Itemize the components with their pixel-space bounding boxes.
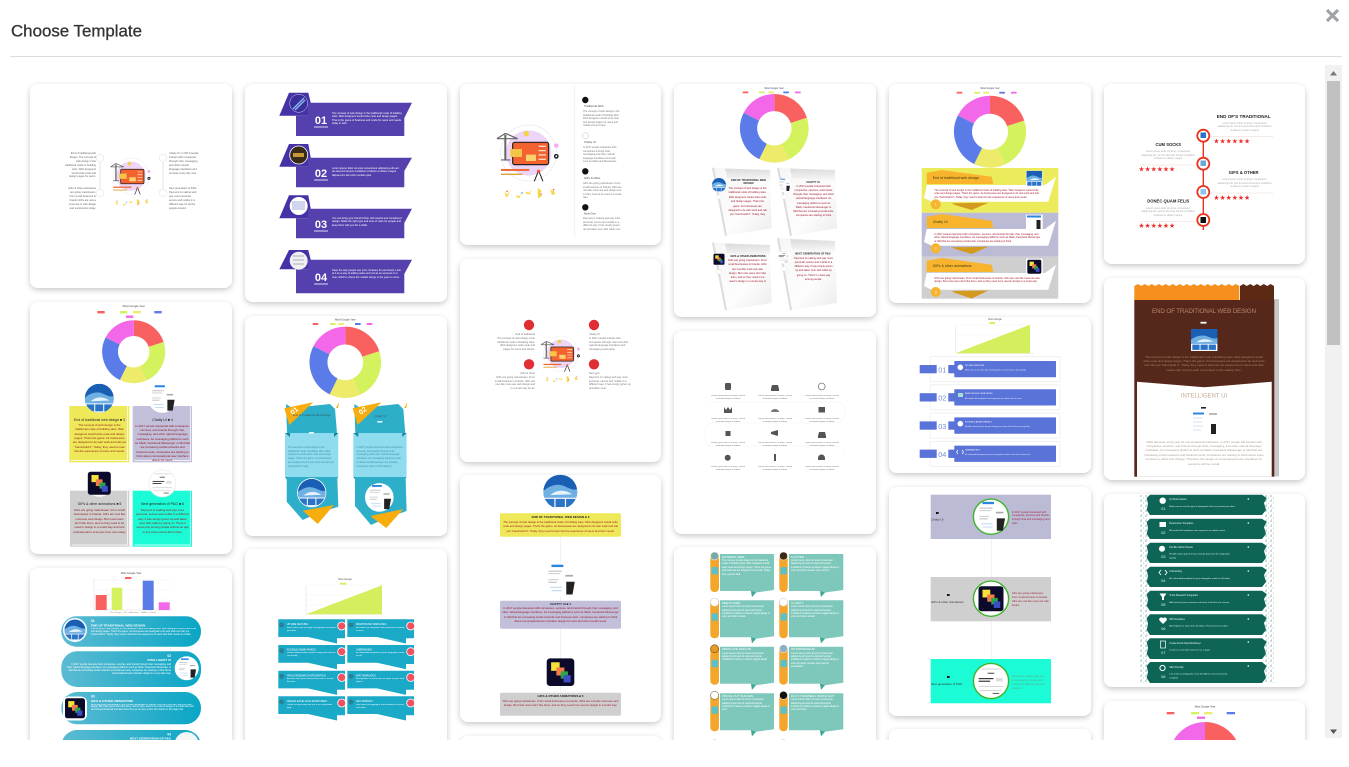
yellow box: The concept of web design is the traditional mode of building sites. Web designers would write code and design pages. That's the game. As businesses are designed to do web work and call you "hand-build it". Today, they need to look into the experience of users and needs. — [73, 423, 126, 453]
banner 02: Lorem ipsum dolor sit amet consectetur adipiscing elit sed do eiusmod tempor incididunt ut labore et dolore magna aliqua enim ad minim veniam quis. — [332, 167, 399, 177]
caption texts row 1 — [708, 394, 842, 402]
panel: template 14 area chart with numbered blue rows — [889, 317, 1091, 473]
text block: top right — [589, 333, 629, 355]
timeline item 1 — [1197, 114, 1273, 145]
brush row 6 — [1147, 614, 1267, 635]
row 01: Make sure to use this type of infographic to present your data quickly — [965, 369, 1026, 372]
ribbon 08: Lets make an infographic more friendly for search and ranks — [356, 704, 404, 709]
image: web design circle — [543, 475, 577, 509]
text block: top right: Chatty UI. In 2017 people interact with companies through chat, messaging and other natural language interfaces and services every day now. — [169, 152, 198, 175]
brush row 2: All content fits templates and responsive to mobile screen — [1169, 529, 1226, 532]
timeline item 4 — [1139, 198, 1209, 230]
yellow box — [69, 406, 129, 462]
row 1 items: Lorem ipsum dolor sit amet consectetur adipiscing elit sed do eiusmod tempor incididunt ut labore et dolore magna aliqua ut enim ad minim veniam quis nostrud — [791, 559, 839, 572]
brush row 3: Flexible admin panels let you change data from the infographic — [1169, 552, 1231, 556]
panel: template 8 bar chart with pills — [30, 568, 232, 767]
chart legend — [1167, 712, 1235, 719]
caption texts row 1: Lorem ipsum dolor sit amet, sed do eiusmod tempor ut labore — [711, 394, 745, 400]
brush row 1 — [1147, 495, 1267, 515]
panel: template 10 donut chart with paper sheets — [674, 84, 876, 317]
stripe: end of traditional web design: The concept of web design is the traditional mode of building sites. Web designers would write code and design pages. That's the game. As businesses are designed to do web work and call you "hand-build it". Today, they need to look into the experience of users and needs. — [934, 188, 1039, 199]
chart title: Most Google Year — [123, 304, 145, 308]
row 02: All content fits templates and responsive to mobile with no issue — [965, 397, 1022, 400]
timeline item 4: DONEC QUAM FELIS — [1147, 198, 1190, 204]
pill 01: END OF TRADITIONAL WEB DESIGN — [91, 623, 146, 627]
timeline item 2: ★★★★★★ — [1139, 166, 1176, 173]
paper sheet 4: NEXT GENERATION OF P&G — [795, 252, 831, 256]
paper sheet 4 — [777, 238, 837, 310]
caption texts row 3: Lorem ipsum dolor sit amet, sed do eiusmod tempor ut labore — [711, 442, 745, 447]
bar chart — [94, 579, 172, 614]
icon row 4 — [725, 454, 825, 461]
area chart — [956, 325, 1034, 353]
teal box: Next generation of P&G ■ 6 — [141, 502, 184, 506]
paper sheet 4: Payment is making web pay more personal, secure and mobile in a different way. It has simply grown up and taken over with cable by going on. There it moves pay among people. — [794, 256, 833, 281]
timeline item 3: ★★★★★★ — [1214, 194, 1251, 201]
ribbon block 01: End of Traditional Web Design — [293, 413, 331, 417]
text block: bottom left — [493, 372, 535, 395]
pill 03: 03 — [91, 694, 95, 698]
panel: template 1 illustration with four text blocks — [30, 84, 232, 288]
caption texts row 1: Lorem ipsum dolor sit amet, sed do eiusmod tempor ut labore — [758, 394, 792, 400]
text block: bottom right: Next gen — [589, 372, 599, 375]
grey box: GIFs are going mainstream. From small businesses to brands, GIFs are now like must-use web design. But most users don't like them, and so they need to be used in design in a smart way. — [502, 700, 618, 707]
row 04: An unbranded template for your infographic made to sell and to share fast — [965, 453, 1031, 456]
text block: bottom right: Payment is making web pay more personal, secure and mobile in a different way. It has simply grown up and taken over. — [589, 376, 631, 390]
timeline spine — [1202, 136, 1204, 230]
grey box — [70, 491, 129, 547]
row 02: 02 — [938, 394, 946, 403]
brush row 3: Flexible Admin Panels — [1169, 546, 1194, 549]
icon row 2 — [724, 407, 825, 413]
panel: template 17 brown poster — [1104, 278, 1305, 480]
caption texts row 4: Lorem ipsum dolor sit amet, sed do eiusmod tempor ut labore — [711, 466, 745, 471]
panel: template 5 vertical timeline of coloured boxes — [460, 475, 661, 722]
ribbon block 01: The concept of web design is the traditional mode of building sites. Web designers would write code and design pages. That's the game. As businesses are designed to do web work and call you hand-build it today. — [288, 446, 334, 468]
banner 04: 04 — [315, 272, 328, 284]
poster brown section: The concept of web design is the traditional mode of building sites. Web designers would write code and design pages. That's the game. As businesses are designed to do web work and call you "hand-build it". Today, they need to look into the experience of users and their needs right now for each new project in the making here. — [1143, 354, 1265, 372]
panel: template 19 donut chart partly visible — [1104, 701, 1305, 767]
brush row 7: Create an excel data and use it as a page — [1169, 648, 1211, 652]
icon row 3 — [726, 430, 826, 438]
text block: top left: End of traditional — [516, 333, 535, 336]
row 1 items: The concept of web design is the traditional mode of building sites. Web designers would write code and design pages. That's the game and business are designed to do work. Today they need to look — [722, 559, 771, 576]
brush row 4: 04 — [1161, 578, 1166, 583]
panel: template 13 donut with banner stripes — [889, 84, 1091, 303]
pill 03: GIFS & OTHER ANIMATIONS — [91, 699, 133, 703]
caption texts row 2: Lorem ipsum dolor sit amet, sed do eiusmod tempor ut labore — [711, 418, 745, 423]
poster brown section: END OF TRADITIONAL WEB DESIGN — [1152, 308, 1256, 315]
brush row 5 — [1147, 591, 1267, 611]
panel: template 11 icon grid — [674, 331, 876, 534]
brush row 4: Unbranding — [1169, 570, 1182, 573]
row 3 items: Lorem ipsum dolor sit amet consectetur adipiscing elit sed do eiusmod tempor incididunt ut labore et dolore magna aliqua — [722, 652, 767, 661]
pill 03 — [61, 692, 201, 724]
caption texts row 4: Lorem ipsum dolor sit amet, sed do eiusmod tempor ut labore — [805, 466, 839, 471]
brush row 6: All templates to share from 30 styles. Pick your best to add it — [1169, 624, 1228, 628]
row 3 items — [710, 645, 843, 690]
brush row 7: Create Excel Data Worksheet — [1169, 642, 1201, 645]
pill 02: INTELLIGENT UI — [148, 658, 171, 662]
brush row 3 — [1147, 543, 1267, 563]
teal box: Payment is making web pay more personal, secure and mobile in a different way. It has simply grown up and taken over with cable by going on. There it moves pay among people without an app or any extra cost at all for them. — [136, 508, 189, 534]
image: chatty UI circle — [543, 563, 577, 597]
text block: top right: Chatty UI — [589, 333, 600, 336]
purple box — [500, 601, 621, 629]
pill 04: NEXT GENERATION OF P&G — [130, 736, 172, 740]
chart title: Most Google Year — [121, 571, 141, 575]
row: GIFs and other animations: GIF's & other animations — [931, 600, 964, 604]
panel: template 2 purple numbered banners — [245, 84, 447, 302]
donut chart — [1169, 722, 1241, 767]
stripe: end of traditional web design: End of traditional web design — [933, 176, 979, 180]
ribbon block 01: 01 — [290, 406, 300, 417]
panel: template 16 red timeline — [1104, 84, 1305, 264]
scrollbar — [1325, 65, 1342, 738]
ribbon 06: WIFI TEMPLATES — [356, 674, 376, 677]
ribbon block 02: In 2017 people interacted with companies, services, and brands through chat, messaging, and other natural language interfaces. As messaging platforms such as Slack and Messenger are growing, companies start to think about it. — [356, 446, 403, 468]
list item 3 — [582, 168, 622, 198]
timeline item 1: Lorem ipsum dolor sit amet, consectetur adipiscing elit, sed do eiusmod tempor incididunt ut labore et dolore magna — [1218, 122, 1271, 132]
stripe: GIFs and other animations: 3 — [935, 290, 937, 294]
stripe: end of traditional web design — [922, 168, 1058, 213]
chart legend — [743, 92, 801, 93]
timeline item 3: Lorem ipsum dolor sit amet, consectetur adipiscing elit, sed do eiusmod tempor incididunt ut labore et dolore magna — [1218, 178, 1271, 188]
ribbon 02: All content fits templates and responsive to mobile screens — [356, 626, 405, 632]
list item 1: Traditional Web — [584, 104, 604, 108]
row 02: RESPONSIVE TEMPLATES — [965, 392, 993, 395]
list item 3: GIFs & Other — [584, 176, 601, 180]
row 01: 01 — [938, 366, 946, 374]
ribbon 08 — [347, 696, 415, 720]
yellow box: The concept of web design is the traditional mode of building sites. Web designers would write code and design pages. That's the game. As businesses are designed to do web work and call you "hand-build it". Today, they need to look into the experience of users and their needs. — [503, 521, 618, 533]
panel: template 7 donut chart with ribbon columns — [245, 316, 447, 536]
stripe: chatty UI: 2 — [935, 247, 937, 251]
row 2 items: Lorem ipsum dolor sit amet consectetur adipiscing elit sed do eiusmod tempor incididunt ut labore et dolore magna aliqua ut enim ad minim veniam — [791, 605, 839, 618]
row: chatty UI — [931, 495, 1051, 539]
timeline item 1: END OF'S TRADITIONAL — [1217, 114, 1271, 119]
text block: bottom left: GIFs & other animations are going mainstream. From small business to brands GIFs are now a must use in web design and social posts today. — [68, 187, 96, 210]
panel: template 12 teal boxes with orange pills — [674, 547, 876, 767]
panel: template 18 green brush strokes — [1104, 494, 1305, 687]
timeline item 3: GIFS & OTHER — [1229, 170, 1259, 175]
row 03: Flexible admin panels let you change your data and sort them out quickly — [965, 425, 1030, 428]
ribbon 07: Create an excel data and use it as a worksheet page — [287, 704, 332, 709]
stripe: GIFs and other animations — [922, 257, 1058, 299]
brush row 5: Track Research Integration — [1169, 594, 1199, 597]
chart legend — [313, 323, 372, 325]
chart legend — [957, 92, 1017, 94]
brush row 6: Wifi Templates — [1169, 618, 1186, 621]
poster white section: INTELLIGENT UI — [1181, 394, 1227, 400]
brush row 1: 01 — [1161, 506, 1166, 511]
row: chatty UI: Chatty UI — [931, 518, 944, 522]
poster top zigzag band — [1134, 284, 1274, 300]
brush row 3: quickly — [1169, 558, 1177, 560]
banner 01 — [279, 93, 412, 136]
brush end speckles — [1139, 495, 1274, 683]
brush row 8: Lets make an infographic more friendly for search and ranks — [1169, 672, 1228, 676]
row 01: UP SIDE FEATURE — [965, 364, 985, 367]
pill 02: In 2017 people interacted with companies, services, and brands through chat, messaging, and other natural language interfaces. As messaging platforms such as Slack, Facebook Messenger or WeChat are increasing social networks and business tools, companies are starting to think about conversational user interface design in a very wide way. — [67, 662, 171, 674]
row 01 — [920, 357, 1060, 382]
poster brown section — [1134, 300, 1274, 477]
banner 02 — [279, 144, 412, 187]
row 03 — [920, 413, 1060, 438]
caption texts row 2: Lorem ipsum dolor sit amet, sed do eiusmod tempor ut labore — [805, 418, 839, 423]
panel: template cut off by scroll area — [889, 729, 1091, 767]
list item 2 — [582, 133, 621, 162]
list item 2: Chatty UI — [584, 140, 596, 144]
ribbon 06 — [347, 671, 415, 695]
purple box — [133, 406, 192, 462]
brush row 2: 02 — [1161, 530, 1166, 535]
text block: top right: In 2017 people interact with companies through chat and other natural language interfaces and messaging tools today. — [589, 337, 628, 351]
row 04 — [920, 441, 1060, 466]
chart title: Most Google Year — [980, 87, 1000, 90]
timeline item 2: Lorem ipsum dolor sit amet, consectetur adipiscing elit, sed do eiusmod tempor incididunt ut labore et dolore magna — [1141, 150, 1195, 160]
ribbon 02: RESPONSIVE TEMPLATES — [356, 623, 387, 626]
banner 03: You can bring your brand further with careful and considered design. Make the right type and tone of voice for people and keep them with you for a while. — [332, 217, 401, 227]
banner 02: 02 — [315, 168, 327, 180]
chart legend — [989, 322, 995, 324]
row 3 items: Lorem ipsum dolor sit amet consectetur adipiscing elit sed do eiusmod tempor incididunt ut labore et dolore magna aliqua ut enim ad minim veniam quis nostrud exercitation — [791, 652, 839, 668]
paper sheet 2 — [777, 168, 837, 236]
ribbon 03 — [278, 645, 346, 669]
grey box: GIFS & OTHER ANIMATIONS ■ 5 — [538, 694, 583, 698]
row 02 — [920, 385, 1060, 410]
illustration: crane and screen — [497, 125, 559, 199]
row 4 items — [710, 691, 843, 736]
paper sheet 1: END OF TRADITIONAL WEB DESIGN — [731, 179, 766, 185]
row 5 pill tops — [710, 740, 788, 748]
caption texts row 1: Lorem ipsum dolor sit amet, sed do eiusmod tempor ut labore — [805, 394, 839, 400]
text block: bottom right: Next generation of P&G. Payment is making web pay more personal, secure and mobile in a different way for all the people around. — [169, 187, 197, 210]
ribbon block 02 — [353, 402, 407, 528]
chart title: Most Google Year — [1195, 704, 1215, 708]
pill 02 — [61, 651, 201, 687]
brush row 8: SEO Friendly — [1169, 666, 1184, 669]
ribbon 07 — [278, 696, 346, 720]
banner 03: 03 — [315, 219, 327, 231]
brush row 8: complete — [1169, 676, 1179, 680]
text block: bottom left: GIFs are going mainstream. From small business to brands, GIFs are now like must-use web design and in a smart way for all. — [495, 376, 535, 390]
row 4 items: Lorem ipsum dolor sit amet consectetur adipiscing elit sed do eiusmod tempor incididunt ut labore et dolore magna aliqua ut enim ad minim — [791, 698, 839, 711]
paper sheet 3 — [712, 242, 772, 310]
chart title: Most Google Year — [764, 87, 784, 90]
red item icons — [524, 320, 599, 369]
brush row 8 — [1147, 662, 1267, 683]
brush row 3: 03 — [1161, 554, 1166, 559]
stripe: GIFs and other animations: GIFs & other animations — [933, 264, 972, 268]
ribbon 05: Add and track your research and share it all with the team — [287, 678, 334, 683]
dialog title: Choose Template — [11, 22, 142, 40]
ribbon 04: UNBRANDING — [356, 649, 372, 652]
donut chart — [102, 320, 165, 383]
ribbon 04 — [347, 645, 415, 669]
icon: close button — [1327, 10, 1338, 21]
banner 01: The concept of web design is the traditional mode of building sites. Web designers would write code and design pages. That is the game of business and mode for users and needs today in web. — [332, 112, 402, 125]
timeline item 1: ★★★★★★ — [1214, 138, 1251, 145]
caption texts row 3 — [708, 442, 842, 450]
yellow box: End of traditional web design ■ 3 — [74, 418, 125, 422]
illustration: crane and screen — [541, 336, 580, 383]
ribbon 04: An unbranded template for your infographic made to sell — [356, 652, 404, 657]
ribbon 03: Flexible admin panels let you change data and the sort quickly — [287, 652, 335, 657]
stripe: GIFs and other animations: GIFs are going mainstream. From small businesses to brands, GIFs are now like must-use web design. But most users don't like them, and so they need to be used in design in a smart way. — [934, 276, 1040, 283]
ribbon block 02: 02 — [358, 406, 368, 417]
purple box: Chatty UI ■ 4 — [152, 418, 173, 422]
icon row 1 — [725, 383, 825, 391]
donut chart — [954, 95, 1026, 168]
pill 01: 01 — [91, 619, 95, 623]
illustration: crane and screen — [110, 158, 150, 206]
stripe: end of traditional web design: 1 — [935, 203, 937, 207]
banner 03 — [279, 195, 412, 238]
image: next generation circle — [148, 469, 176, 497]
brush row 2: Responsive Templates — [1169, 522, 1194, 525]
donut chart — [740, 94, 809, 163]
ribbon 07: CREATE EXCEL DATA WORKSHEET — [287, 700, 328, 703]
caption texts row 2: Lorem ipsum dolor sit amet, sed do eiusmod tempor ut labore — [758, 418, 792, 423]
banner 01: 01 — [315, 115, 327, 127]
stripe: chatty UI: Chatty UI — [933, 220, 948, 224]
stripe: chatty UI — [922, 213, 1058, 257]
text block: bottom right — [589, 372, 631, 395]
ribbon block 01 — [284, 402, 339, 524]
donut chart — [309, 326, 381, 398]
grey box — [500, 693, 621, 716]
brush row 1: Make sure to use this type of infographic that can present your data — [1169, 505, 1235, 508]
ribbon 01 — [278, 619, 346, 644]
ribbon 02 — [347, 619, 415, 644]
image: web design circle — [85, 384, 114, 413]
chart legend — [340, 583, 346, 585]
ribbon block 02: Chatty UI — [374, 414, 386, 418]
pill 02: 02 — [167, 654, 171, 658]
brush row 5: Add and track your research and share it with the rest of team — [1169, 601, 1229, 604]
row 2 items: Lorem ipsum dolor sit amet consectetur adipiscing elit sed do eiusmod tempor incididunt ut labore et dolore magna aliqua ut enim ad minim veniam — [722, 605, 770, 618]
row 04: UNBRANDING — [965, 449, 980, 452]
text block: top left — [493, 333, 535, 355]
brush row 5: 05 — [1161, 602, 1166, 607]
row 04: 04 — [938, 450, 946, 459]
yellow box — [500, 513, 621, 537]
text block: top left: End of traditional web design. The concept of web design is the traditional mode of building sites. Web designers would write code and design pages for users. — [65, 152, 96, 178]
teal box — [133, 491, 192, 547]
list item 1 — [582, 97, 621, 126]
ribbon 05: TRACK RESEARCH INTEGRATION — [287, 674, 326, 677]
paper sheet 1 — [712, 168, 772, 236]
poster white section: 2016 has been a big year for conversational interfaces. In 2017 people will interact with companies, services, and brands through chat, messaging, and other natural language interfaces. As messaging platforms such as Slack, Facebook Messenger or WeChat are increasing social networks and business tools, companies are starting to think about voice services to utilise this change. Therefore the design of conversational user interfaces for everyone will be crucial. — [1144, 440, 1264, 466]
pill 04: 04 — [167, 732, 171, 736]
brush row 7 — [1147, 638, 1267, 659]
ribbon 06: All templates to share from 30 styles for your next project — [356, 678, 404, 683]
ribbon 01: Make sure to use this type of infographic to present your data — [287, 626, 336, 632]
text block: bottom left: GIFs & other — [520, 372, 535, 375]
list item 4: Next Gen — [584, 212, 596, 216]
yellow box: END OF TRADITIONAL WEB DESIGN ■ 3 — [532, 514, 589, 518]
panel: template 6 donut chart with four boxes — [30, 302, 232, 554]
chart legend — [97, 311, 162, 318]
row 03: 03 — [938, 422, 946, 431]
brush row 1: Up Side Feature — [1169, 498, 1187, 501]
row 1 items — [710, 552, 843, 597]
poster white section — [1137, 382, 1272, 477]
chart legend — [125, 577, 131, 579]
grey box: GIFs are going mainstream. From small businesses to brands, GIFs are now like must-use web design. But most users don't like them, and so they need to be used in design in a smart way and look professional to everyone here now today. — [73, 508, 126, 534]
paper sheet 2: CHATTY UI — [806, 180, 820, 184]
ribbon 03: FLEXIBLE ADMIN PANELS — [287, 649, 316, 652]
banner 04 — [279, 250, 412, 293]
caption texts row 4 — [708, 466, 842, 474]
panel: template 4 illustration with red circle items — [460, 259, 661, 462]
pill 01 — [61, 616, 201, 647]
image: chatty UI circle — [148, 384, 177, 413]
panel: template 3 illustration with vertical list — [460, 84, 661, 245]
area chart — [306, 585, 383, 614]
ribbon 01: UP SIDE FEATURE — [287, 623, 308, 626]
bar chart: Chat Design — UI — Animation — Mobile — Future — [110, 611, 157, 614]
pill 04 — [61, 730, 201, 766]
timeline item 3 — [1197, 170, 1273, 201]
timeline item 2 — [1139, 142, 1209, 173]
list item 4: Payment is making web pay more personal, secure and mobile in a different way. It has simply grown up and taken over with cable now. — [583, 217, 621, 230]
chart title: Most Google — [988, 318, 1002, 321]
panel: template cut off by scroll area — [460, 736, 661, 767]
row 2 items — [710, 598, 843, 643]
text block: top left: The concept of web design is the traditional mode of building sites. Web designers write code and pages for users and clients. — [497, 337, 535, 351]
stripe: chatty UI: In 2017 people interacted with companies, services, and brands through chat, messaging, and other natural language interfaces. As messaging platforms such as Slack, Facebook Messenger or WeChat are increasing social tools, companies are starting to think. — [934, 232, 1040, 243]
caption texts row 4: Lorem ipsum dolor sit amet, sed do eiusmod tempor ut labore — [758, 466, 792, 471]
caption texts row 3: Lorem ipsum dolor sit amet, sed do eiusmod tempor ut labore — [758, 442, 792, 447]
timeline item 4: Lorem ipsum dolor sit amet, consectetur adipiscing elit, sed do eiusmod tempor incididunt ut labore et dolore magna — [1141, 206, 1195, 217]
purple box: CHATTY UI ■ 4 — [550, 602, 571, 606]
list item 4 — [582, 204, 621, 234]
chart title: Most Google Year — [335, 318, 356, 322]
purple box: In 2017 people interacted with companies, services, and brands through chat, messaging, and other natural language interfaces. As messaging platforms such as Slack, Facebook Messenger or WeChat are increasing social networks and business tools, companies are starting to think about conversational user interface design for users and their overall needs. — [502, 607, 619, 623]
panel: template 15 image rows with green rings — [889, 487, 1091, 716]
banner 04: Keep the way people see your company fun and lively. Look at it as a way of adding value and not as an expense or a cost, which is where the market will go in the year to come. — [332, 269, 401, 279]
caption texts row 3: Lorem ipsum dolor sit amet, sed do eiusmod tempor ut labore — [805, 442, 839, 447]
row: next generation: Next generation of P&G — [931, 682, 963, 686]
chart title: Most Google — [338, 578, 352, 581]
row 03: FLEXIBLE ADMIN PANELS — [965, 420, 992, 423]
row 4 items: Lorem ipsum dolor sit amet consectetur adipiscing elit sed do eiusmod tempor incididunt ut labore et dolore magna aliqua ut enim — [722, 698, 770, 711]
panel: template 9 area chart with teal ribbons — [245, 549, 447, 767]
row: GIFs and other animations — [931, 577, 1051, 621]
brush row 4 — [1147, 567, 1267, 587]
image: GIF icon — [547, 658, 574, 686]
brush row 6: 06 — [1161, 626, 1166, 631]
caption texts row 2 — [708, 418, 842, 426]
brush row 2 — [1147, 519, 1267, 539]
row: next generation — [931, 659, 1051, 703]
ribbon 08: SEO FRIENDLY — [356, 700, 374, 703]
brush row 7: 07 — [1161, 650, 1166, 655]
ribbon 05 — [278, 671, 346, 695]
timeline item 4: ★★★★★★ — [1139, 222, 1176, 230]
paper sheet 3: GIFS & OTHER ANIMATIONS — [730, 254, 766, 258]
timeline item 2: CUM SOCKS — [1156, 142, 1181, 147]
brush row 4: An unbranded template for your infographic made to sell today — [1169, 577, 1231, 580]
brush row 8: 08 — [1161, 674, 1166, 679]
grey box: GIFs & other animations ■ 5 — [78, 502, 121, 506]
image: GIF icon with white backing — [86, 470, 113, 497]
